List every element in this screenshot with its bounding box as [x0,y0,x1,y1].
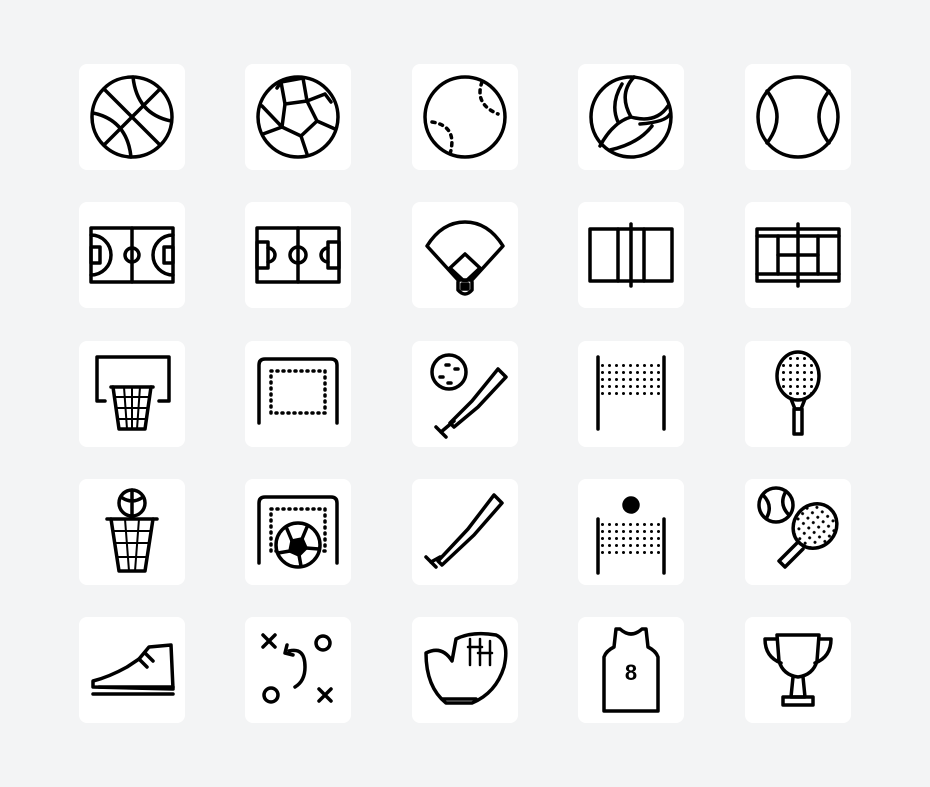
icon: baseball diamond [412,202,518,308]
icon: basketball court [79,202,185,308]
icon: baseball and bat [412,341,518,447]
icon: play diagram [245,617,351,723]
icon: soccer field [245,202,351,308]
icon: soccer goal [245,341,351,447]
icon: tennis racket [745,341,851,447]
icon: volleyball net [578,341,684,447]
icon: baseball glove [412,617,518,723]
icon: basketball [79,64,185,170]
icon: basketball in hoop [79,479,185,585]
icon: volleyball court [578,202,684,308]
icon: baseball bat [412,479,518,585]
icon: soccer goal with ball [245,479,351,585]
icon: sneaker [79,617,185,723]
icon: jersey: 8 [625,660,637,685]
icon: jersey [578,617,684,723]
icon: volleyball over net [578,479,684,585]
icon: volleyball [578,64,684,170]
icon: tennis ball and racket [745,479,851,585]
icon: tennis ball [745,64,851,170]
icon: trophy [745,617,851,723]
icon: baseball [412,64,518,170]
icon: soccer ball [245,64,351,170]
icon: basketball hoop [79,341,185,447]
icon: tennis court [745,202,851,308]
